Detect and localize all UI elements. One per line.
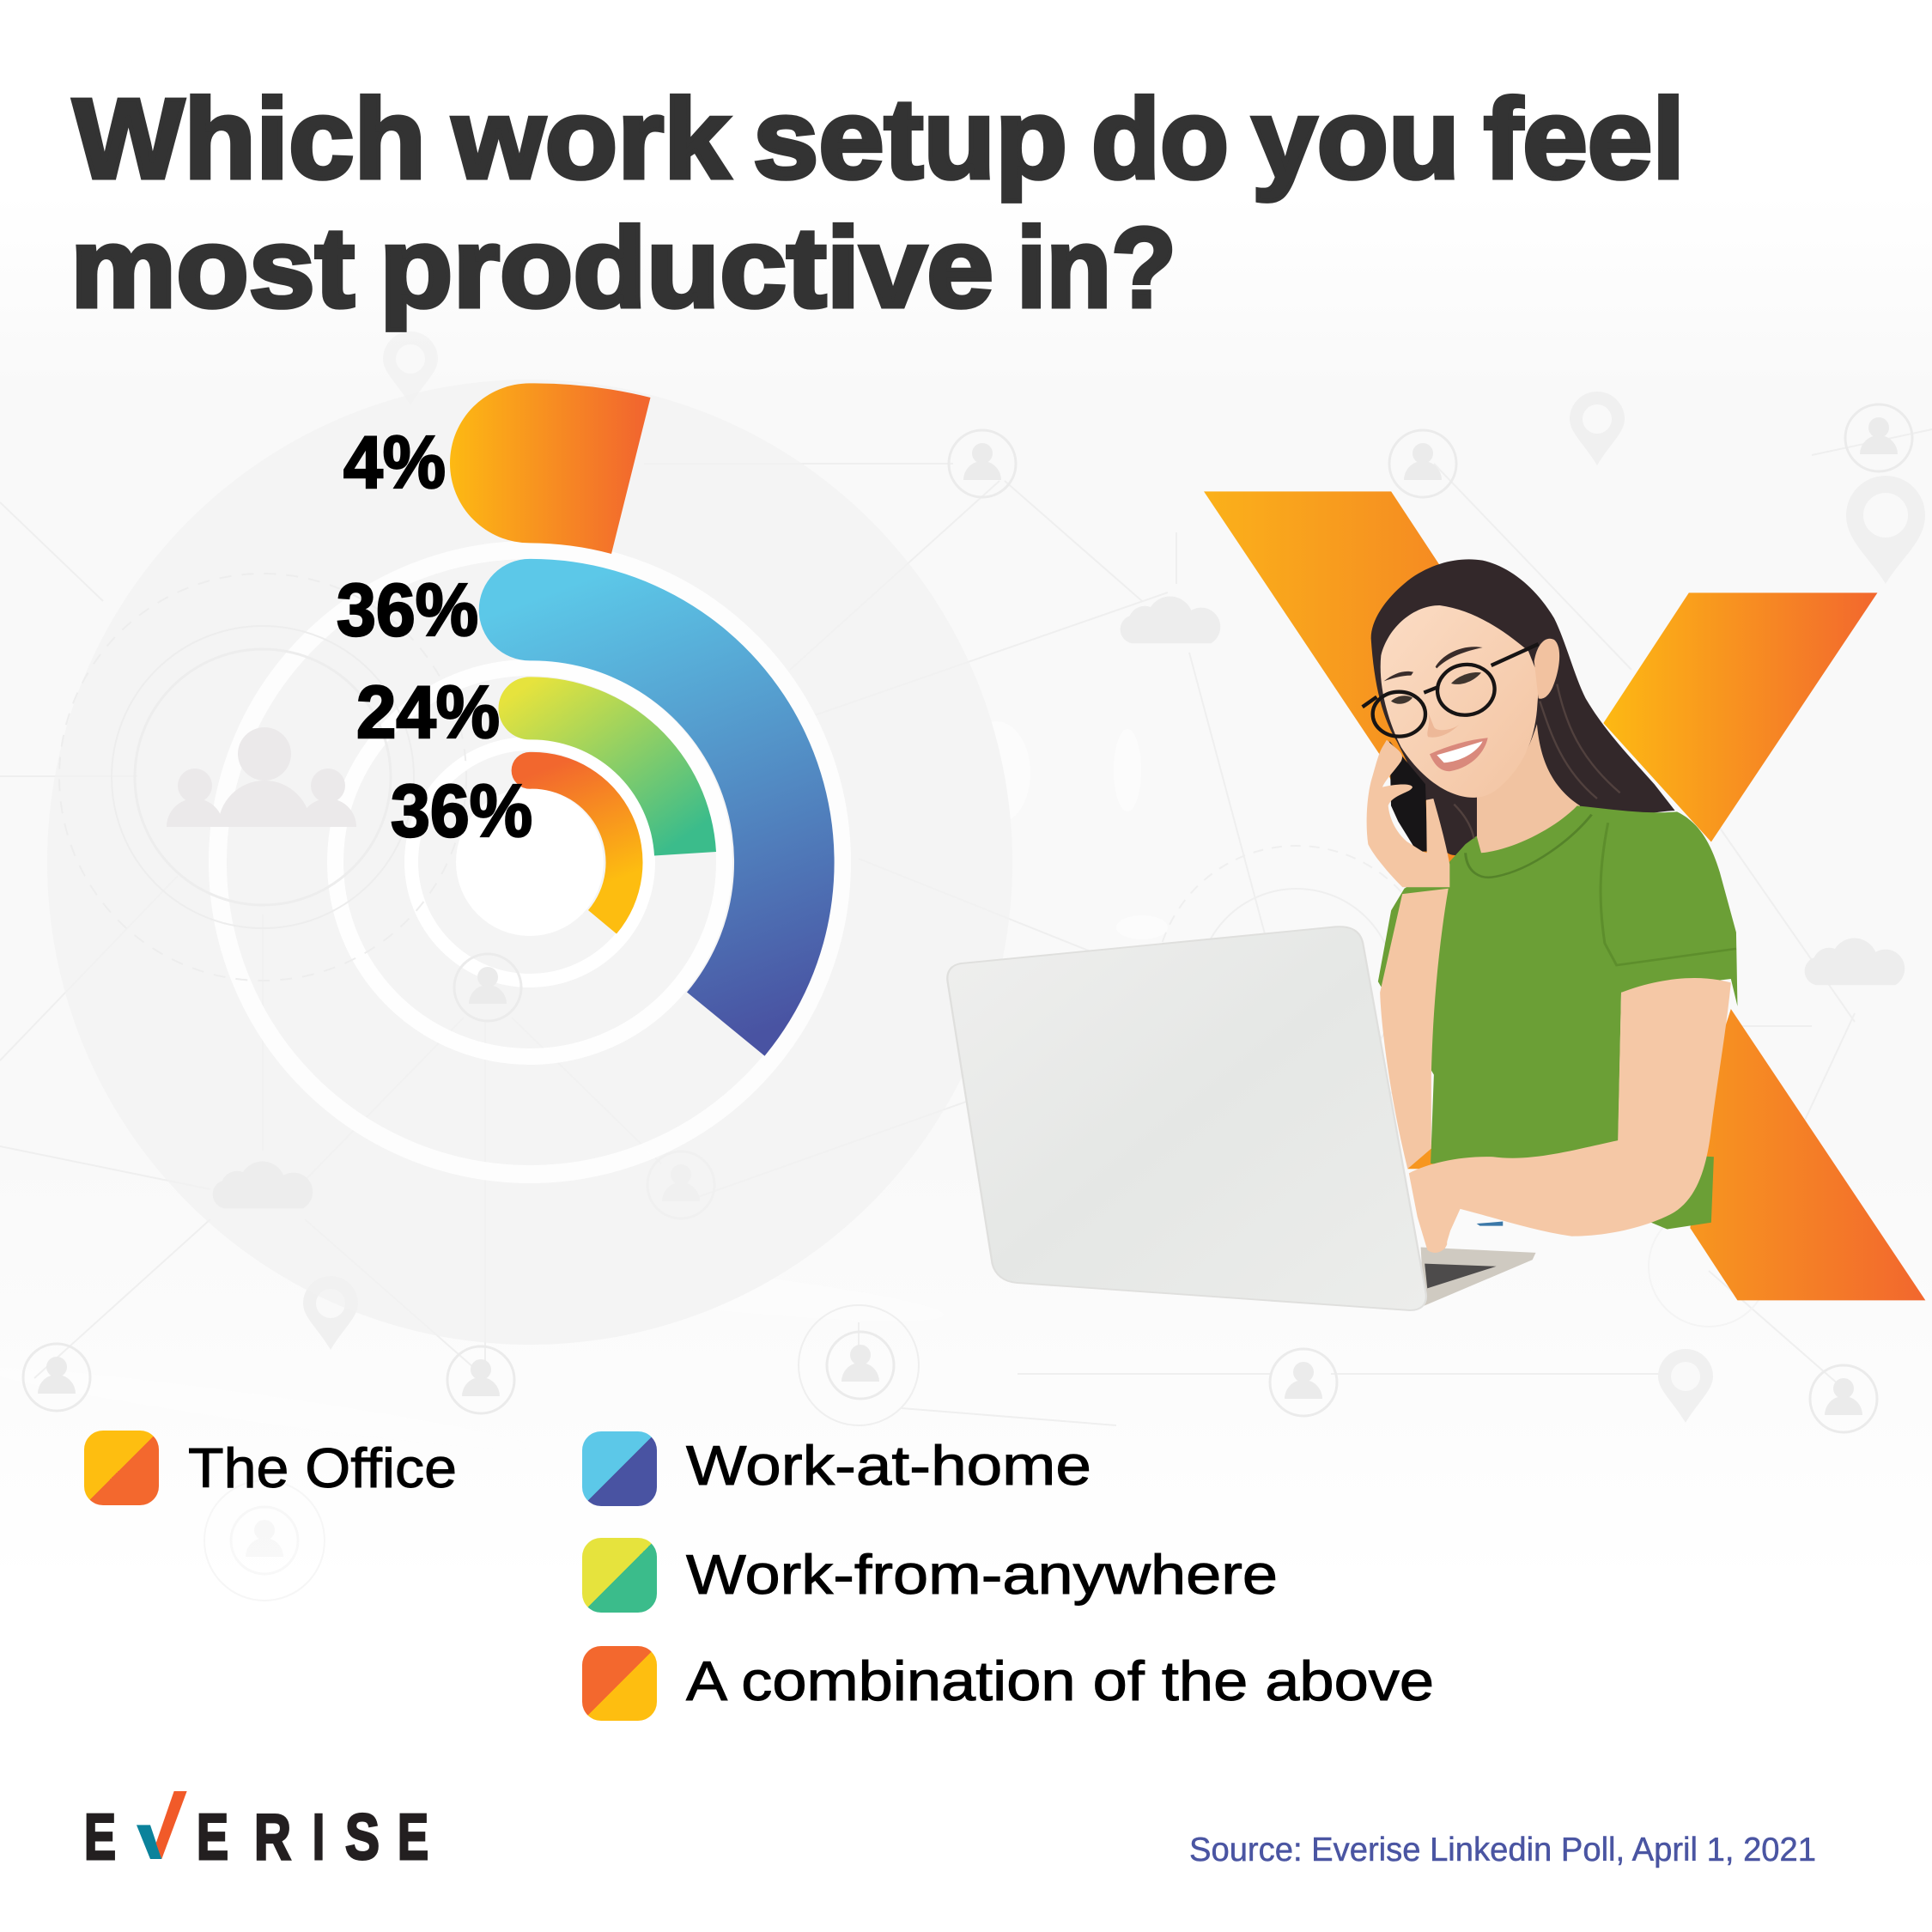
eyes [1391,696,1413,704]
title: feel [1484,76,1685,202]
head, hair and glasses [1363,605,1620,887]
lid [947,927,1426,1310]
chart background: concentric rings [47,380,1012,1345]
title: you [1252,76,1460,202]
torso, shirt and arms [1378,805,1737,1253]
finger [1418,1200,1447,1253]
logo: Everise: I [313,1801,325,1873]
hand [1367,740,1449,887]
radial bar chart [337,383,835,1056]
legend item: A combination of the above [582,1646,1434,1721]
logo: Everise: E [398,1801,428,1873]
legend item: Work-from-anywhere [582,1538,1278,1613]
right arm [1409,978,1731,1253]
legend item: Work-from-anywhere: Work-from-anywhere [686,1543,1278,1606]
logo: Everise [84,1791,428,1873]
label: 24%: 24% [356,671,500,754]
legend item: Work-at-home [582,1431,1091,1506]
logo: Everise: E [84,1801,116,1873]
back hair and neck [1371,559,1675,861]
source note: Source: Everise Linkedin Poll, April 1, 2021 [1189,1832,1816,1868]
background network pattern [0,331,1932,1601]
title: in? [1017,204,1176,331]
title: work [452,76,731,202]
nose shadow [1427,713,1460,738]
arc: The Office 4% [450,383,651,554]
title: productive [380,204,993,331]
hair back [1371,559,1675,855]
face [1381,605,1540,798]
legend item: The Office: The Office [188,1437,457,1499]
title: Which [73,76,426,202]
legend item: The Office [84,1431,457,1505]
logo: Everise: R [254,1801,291,1873]
title: most [70,204,355,331]
phone [1389,741,1428,852]
label: 36% work-at-home: 36% [337,569,478,652]
left forearm [1380,889,1449,1169]
smile [1430,738,1488,771]
logo: Everise: S [345,1801,380,1873]
legend item: Work-at-home: Work-at-home [686,1434,1091,1497]
label: 36% combination: 36% [391,770,532,853]
eyebrows [1384,671,1413,681]
shirt [1378,805,1737,1229]
neck [1477,724,1580,861]
ear [1534,639,1559,699]
label: 4%: 4% [343,422,446,504]
legend [84,1431,1434,1721]
title [70,76,1685,331]
arc: Work-at-home 36% [479,559,835,1056]
arc: Work-from-anywhere 24% [498,677,716,855]
title: setup [753,76,1067,202]
title: do [1091,76,1229,202]
orange X mark [1204,491,1925,1300]
legend item: A combination of the above: A combination of the above [686,1649,1434,1712]
glasses [1363,644,1539,737]
keyboard base [1421,1247,1536,1306]
hair strands [1454,684,1620,839]
illustration: woman on phone with laptop [947,491,1925,1310]
logo: Everise: E [197,1801,228,1873]
laptop [947,927,1536,1310]
arc: combination 36% [512,752,643,934]
